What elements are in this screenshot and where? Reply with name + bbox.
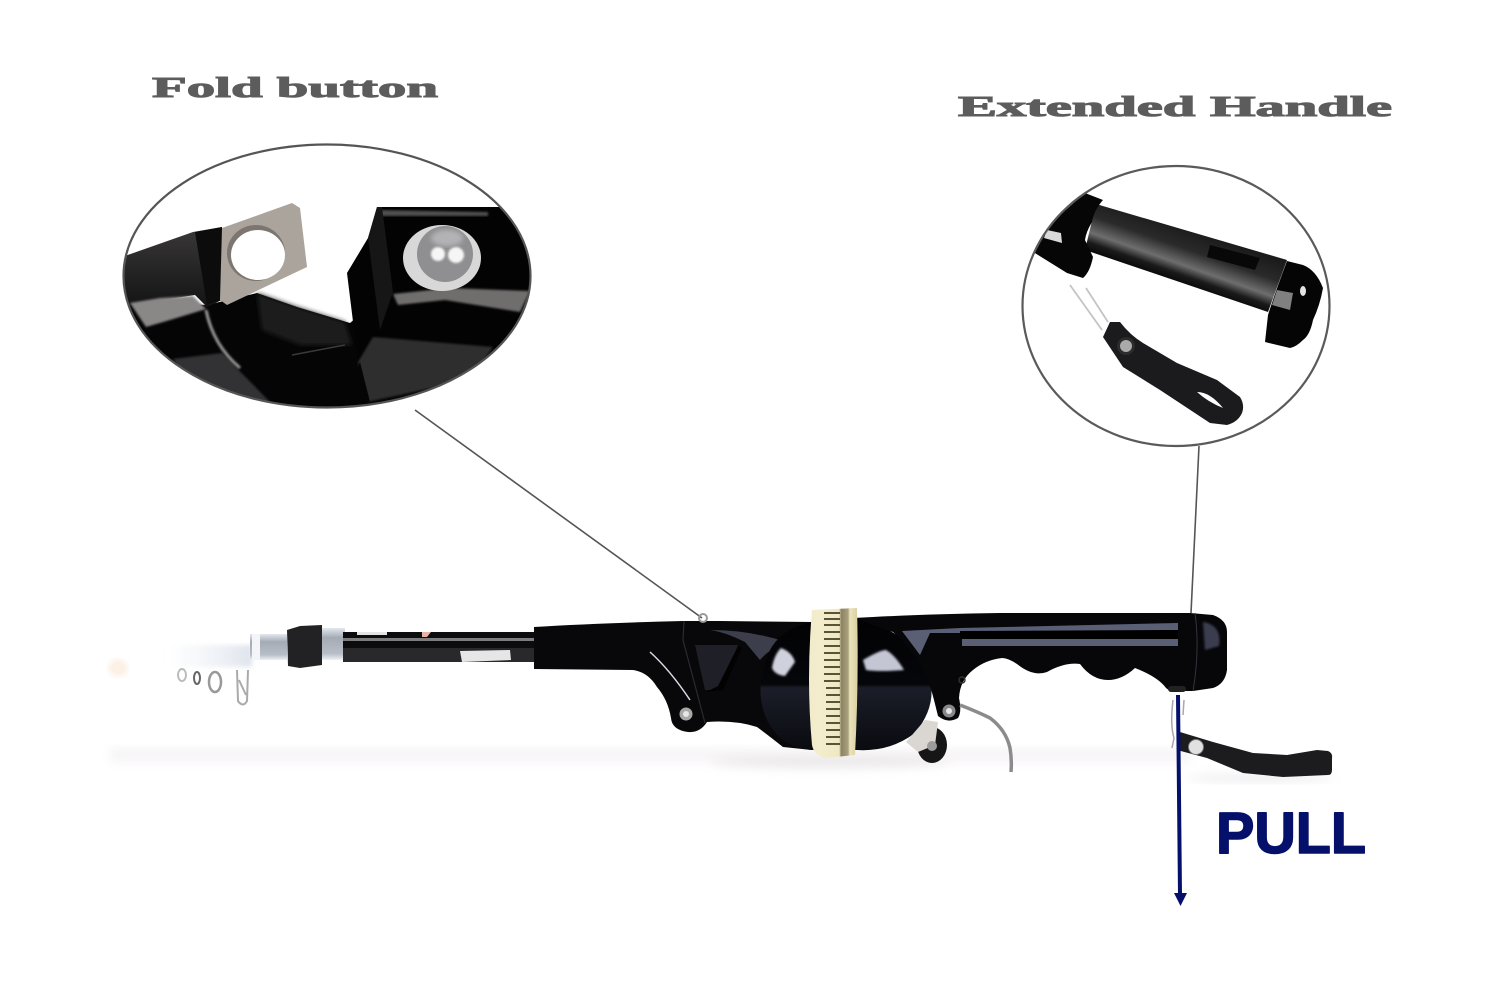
rear grip details <box>902 613 1219 718</box>
reel body <box>760 618 932 750</box>
left bracket <box>120 227 226 307</box>
panel: extended handle close-up <box>1022 166 1330 446</box>
collar <box>287 625 322 668</box>
rod shaft <box>343 632 534 662</box>
ball stud <box>403 225 481 291</box>
collapsed rod tip <box>108 628 345 704</box>
front handle details <box>650 614 786 723</box>
arrow: pull direction <box>1174 695 1187 906</box>
lever <box>960 705 1011 772</box>
floor shadow <box>110 748 1335 781</box>
panel: fold button close-up <box>110 144 540 420</box>
right block <box>347 207 530 321</box>
handle barrel <box>1085 204 1287 312</box>
slot <box>1207 245 1260 270</box>
strap rivet <box>1117 337 1135 355</box>
label: PULL: PULL <box>1216 801 1366 866</box>
steel plate with hole <box>220 203 307 305</box>
wheel <box>906 720 947 763</box>
heading: Fold button: Fold button <box>152 72 438 104</box>
fishing rod <box>108 608 1332 777</box>
wrist strap <box>1172 700 1332 777</box>
end cap <box>1265 261 1323 348</box>
heading: Extended Handle: Extended Handle <box>958 92 1392 123</box>
ellipse outline <box>124 144 530 408</box>
leader line: extended handle <box>1191 446 1199 613</box>
reel highlights <box>772 648 904 676</box>
strap loop <box>1103 322 1243 425</box>
leader line: fold button <box>415 410 702 618</box>
clip wire <box>1070 285 1108 330</box>
front handle <box>534 621 812 750</box>
lower black mass <box>130 293 496 406</box>
rear grip <box>853 613 1227 721</box>
barrel collar <box>1030 193 1103 278</box>
circle outline <box>1022 166 1330 446</box>
spool ring <box>809 608 858 758</box>
